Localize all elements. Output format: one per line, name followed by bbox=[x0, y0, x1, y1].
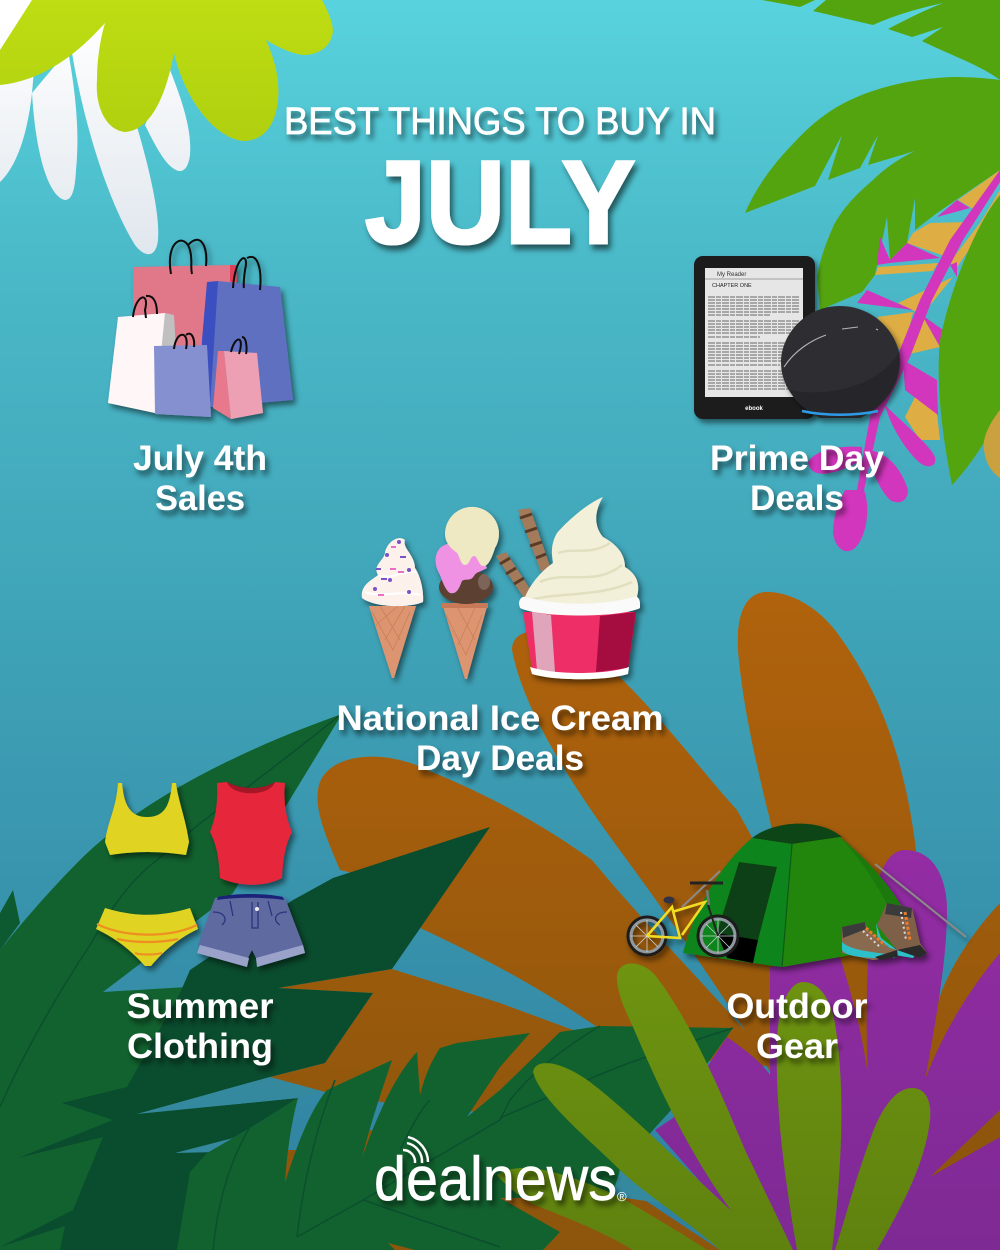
title: BEST THINGS TO BUY IN bbox=[284, 101, 716, 143]
e-reader: ebook bbox=[745, 406, 763, 412]
label: Prime Day Deals bbox=[710, 439, 885, 518]
plant: right gold edge bbox=[984, 410, 1000, 478]
icon: bicycle bbox=[628, 883, 738, 956]
smart speaker bbox=[781, 306, 900, 418]
plant: top-right green leaves bbox=[745, 0, 1000, 310]
e-reader: My Reader bbox=[717, 272, 746, 278]
icon: soft serve cone bbox=[362, 538, 423, 678]
label: Outdoor Gear: Outdoor bbox=[726, 987, 868, 1026]
title bbox=[284, 101, 716, 269]
plant: olive leaves bbox=[497, 964, 930, 1250]
icon: denim shorts bbox=[197, 894, 305, 967]
label: July 4th Sales: Sales bbox=[155, 479, 245, 518]
e-reader: CHAPTER ONE bbox=[712, 283, 752, 289]
plant: bottom dark green palm bbox=[177, 1026, 733, 1250]
icon: frozen yogurt cup bbox=[519, 497, 640, 679]
plant: dark green leaves left bbox=[0, 714, 490, 1250]
label: Summer Clothing: Clothing bbox=[127, 1027, 273, 1066]
icon: hiking boots bbox=[842, 903, 927, 960]
plant: top-left lime leaves bbox=[0, 0, 333, 141]
label: National Ice Cream Day Deals: National Ice Cream bbox=[336, 699, 664, 738]
icon: striped briefs bbox=[96, 908, 198, 966]
plant: brown spike between purple leaves bbox=[930, 1110, 1000, 1177]
plant: purple leaves bbox=[655, 850, 1000, 1250]
e-reader bbox=[694, 256, 815, 419]
plant: gold and magenta leaf bbox=[808, 170, 1000, 551]
label: Outdoor Gear bbox=[726, 987, 868, 1066]
icon: red tank top bbox=[210, 782, 292, 885]
icon: ice creams bbox=[362, 497, 640, 679]
icon: yellow sports top bbox=[105, 783, 189, 855]
plant: teal gaps between leaves bbox=[137, 1077, 325, 1153]
label: Prime Day Deals: Deals bbox=[750, 479, 844, 518]
icon: wafer sticks bbox=[496, 508, 550, 598]
icon: shopping bags bbox=[108, 240, 293, 419]
label: July 4th Sales bbox=[133, 439, 267, 518]
logo: dealnews: dealnews bbox=[374, 1145, 617, 1214]
icon: summer clothing bbox=[96, 782, 305, 967]
label: Summer Clothing bbox=[126, 987, 274, 1066]
plant: right green leaf bbox=[939, 195, 1000, 485]
plant: top-left white leaves bbox=[0, 0, 190, 254]
label: Summer Clothing: Summer bbox=[126, 987, 274, 1026]
logo: dealnews: ® bbox=[617, 1189, 627, 1204]
label: Prime Day Deals: Prime Day bbox=[710, 439, 885, 478]
title: JULY bbox=[365, 137, 635, 269]
label: July 4th Sales: July 4th bbox=[133, 439, 267, 478]
label: National Ice Cream Day Deals: Day Deals bbox=[416, 739, 584, 778]
icon: e-reader and smart speaker bbox=[694, 256, 900, 419]
icon: outdoor gear bbox=[628, 824, 966, 967]
plant: brown leaves bbox=[270, 592, 1000, 1250]
label: National Ice Cream Day Deals bbox=[336, 699, 664, 778]
icon: triple scoop cone bbox=[436, 507, 499, 679]
label: Outdoor Gear: Gear bbox=[756, 1027, 838, 1066]
icon: tent bbox=[682, 824, 966, 967]
